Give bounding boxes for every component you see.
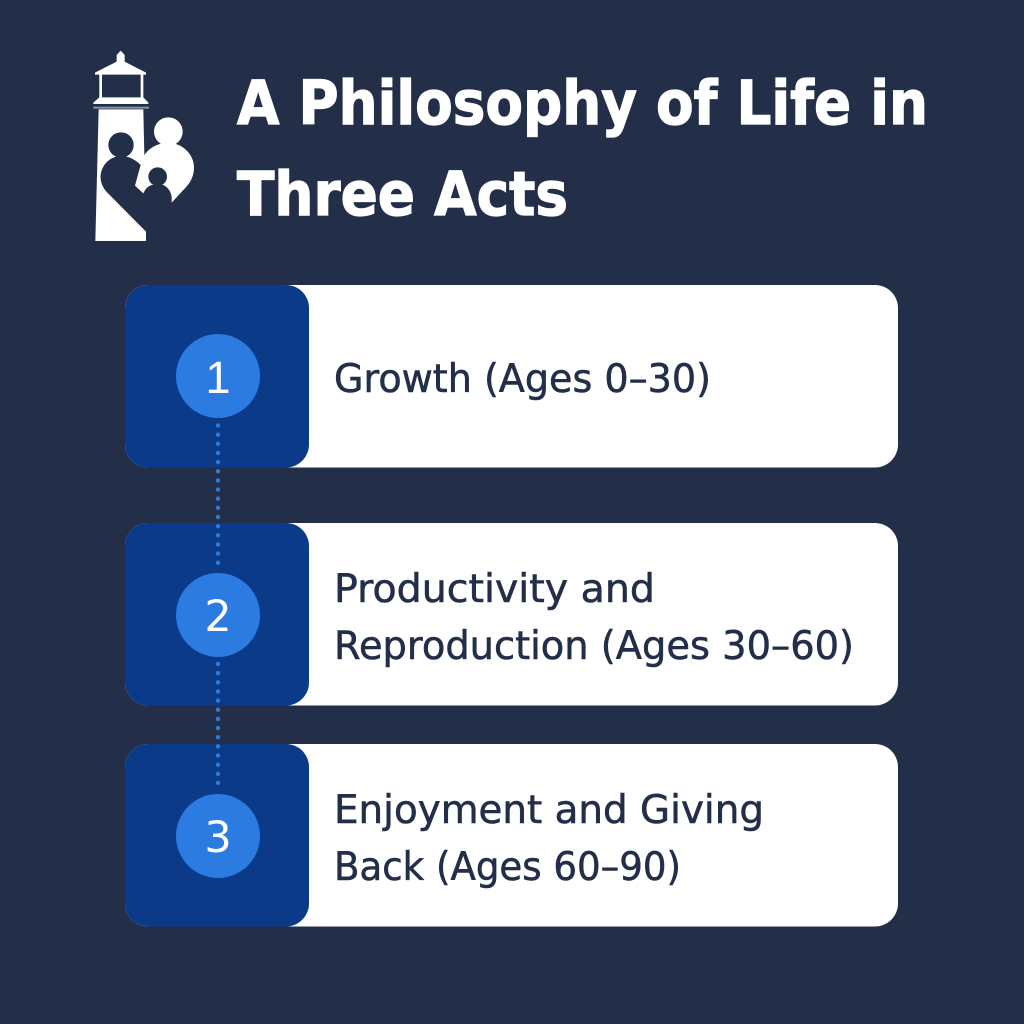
card 3: Enjoyment and Giving Back — [125, 744, 898, 926]
card 2: Productivity and Reproduction: Reproduction (Ages 30–60) — [334, 624, 854, 669]
card 2: Productivity and Reproduction — [125, 523, 898, 706]
card 3: Enjoyment and Giving Back: 3 — [204, 813, 232, 863]
card 2: Productivity and Reproduction: Productivity and — [334, 567, 655, 612]
title — [237, 68, 928, 230]
card 3: Enjoyment and Giving Back: Back (Ages 60–90) — [334, 845, 681, 890]
card 2: Productivity and Reproduction: 2 — [204, 592, 232, 642]
title: Three Acts — [237, 159, 568, 230]
card 1: Growth: Growth (Ages 0–30) — [334, 357, 711, 402]
dotted connector 1 to 2 — [216, 426, 220, 563]
card 3: Enjoyment and Giving Back: Enjoyment and Giving — [334, 788, 764, 833]
logo: lighthouse with family — [93, 51, 194, 241]
card 1: Growth: 1 — [205, 352, 231, 403]
dotted connector 2 to 3 — [216, 664, 220, 783]
title: A Philosophy of Life in — [237, 68, 928, 139]
card 1: Growth — [125, 285, 898, 468]
